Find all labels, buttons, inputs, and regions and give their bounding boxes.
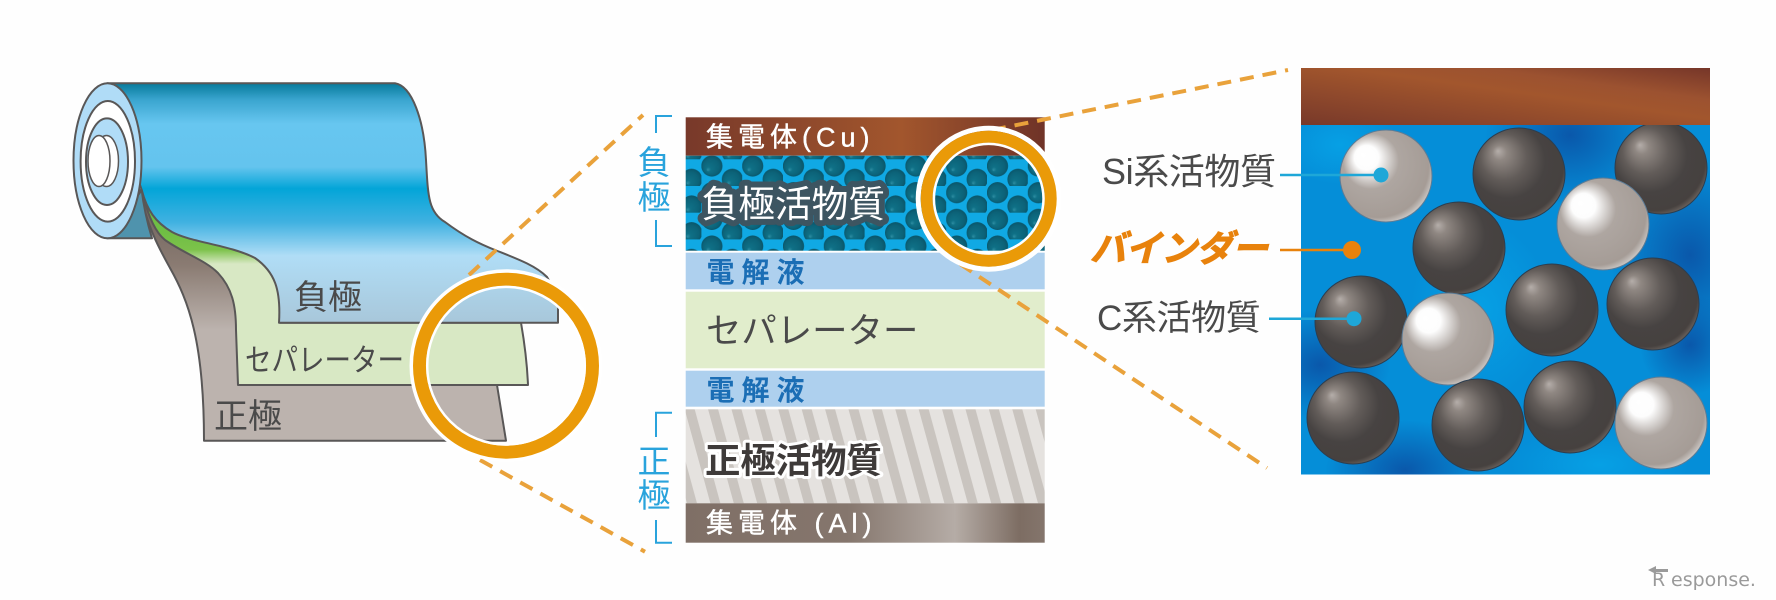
enlarged copper collector bbox=[1301, 68, 1710, 125]
layer: electrolyte lower bbox=[686, 371, 1045, 407]
magnifier ring on cross-section bbox=[918, 128, 1059, 269]
callout: carbon active material: C系活物質 bbox=[1097, 299, 1260, 338]
watermark: Response logo: esponse. bbox=[1671, 569, 1756, 591]
bracket label: anode: 負 bbox=[638, 144, 670, 181]
roll end rings bbox=[74, 83, 142, 238]
text: separator: セパレーター bbox=[706, 311, 918, 351]
anode sheet bbox=[107, 83, 558, 323]
text: cathode active material: 正極活物質 bbox=[705, 441, 882, 481]
separator sheet bbox=[143, 195, 528, 385]
bracket label: cathode bbox=[638, 413, 672, 543]
label: separator on roll: セパレーター bbox=[245, 343, 404, 378]
layer: electrolyte upper bbox=[686, 253, 1045, 289]
text: electrolyte upper: 電解液 bbox=[706, 257, 812, 288]
watermark: Response logo: R bbox=[1652, 569, 1665, 591]
text: copper collector: 集電体(Cu) bbox=[706, 122, 874, 152]
particles: carbon and silicon spheres bbox=[1307, 122, 1707, 471]
text: electrolyte lower: 電解液 bbox=[706, 375, 812, 406]
layer: cathode active material bbox=[686, 409, 1045, 503]
magnifier ring on roll bbox=[412, 271, 600, 460]
cathode sheet bbox=[140, 190, 506, 441]
enlarged binder background bbox=[1301, 125, 1710, 474]
layered cross-section panel bbox=[686, 117, 1045, 543]
electrode roll illustration bbox=[74, 83, 558, 441]
callout: carbon active material bbox=[1097, 299, 1362, 338]
callout: silicon active material bbox=[1102, 151, 1388, 192]
dashed zoom guide lines bbox=[469, 70, 1288, 552]
label: anode on roll: 負極 bbox=[294, 279, 362, 317]
callout: binder bbox=[1090, 228, 1361, 269]
watermark: Response logo bbox=[1648, 566, 1756, 591]
bracket label: cathode: 極 bbox=[638, 477, 670, 514]
layer: copper current collector bbox=[686, 117, 1045, 156]
text: anode active material: 負極活物質 bbox=[702, 184, 885, 225]
callout: binder: バインダー bbox=[1090, 228, 1269, 269]
bracket label: anode: 極 bbox=[638, 179, 670, 216]
layer: separator bbox=[686, 292, 1045, 368]
roll underside bbox=[107, 190, 152, 238]
enlarged particle panel bbox=[1301, 68, 1710, 474]
callout: silicon active material: Si系活物質 bbox=[1102, 151, 1276, 192]
text: aluminium collector: 集電体 (Al) bbox=[706, 508, 876, 538]
layer: aluminium current collector bbox=[686, 503, 1045, 543]
bracket label: anode bbox=[638, 116, 672, 246]
bracket label: cathode: 正 bbox=[638, 443, 670, 480]
layer: anode active material bbox=[686, 156, 1045, 251]
label: cathode on roll: 正極 bbox=[214, 398, 282, 436]
